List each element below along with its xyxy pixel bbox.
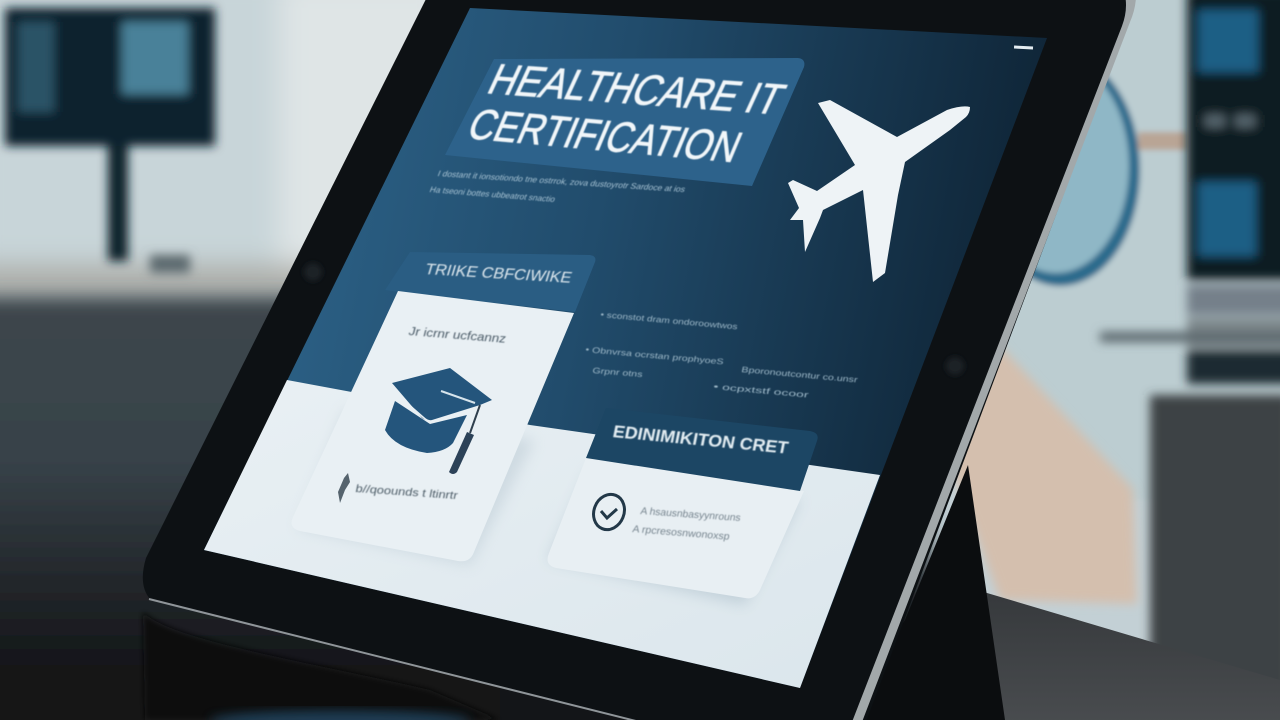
education card header [586,408,818,491]
card caption: Jr icrnr ucfcannz [407,324,508,346]
blurred equipment panel [1100,0,1280,695]
card footer: b//qoounds t ltinrtr [354,483,459,502]
tablet bezel [143,0,1132,720]
card footer icon [338,473,350,503]
bullet list: • Obnvrsa ocrstan prophyoeS [585,345,725,366]
title box [445,58,804,186]
bullet list: • ocpxtstf ocoor [713,382,810,400]
intro text: I dostant it ionsotiondo tne ostrrok, zova dustoyrotr Sardoce at ios [436,168,687,194]
screen dark blue background [204,8,1047,688]
icon: graduation cap [385,368,492,474]
airplane icon [788,100,970,282]
title: HEALTHCARE IT [481,56,792,124]
bullet list: Bporonoutcontur co.unsr [741,365,859,384]
icon: check circle [588,490,630,534]
tablet metal edge [852,0,1136,720]
window dash [1014,46,1033,50]
tablet [143,0,1136,720]
education card heading: EDINIMIKITON CRET [611,421,791,458]
training card [292,291,574,565]
tablet lower rim [149,599,640,720]
bullet list [585,310,859,400]
screen lower light area [204,380,880,688]
education card text: A hsausnbasyynrouns [639,506,742,524]
blurred wall monitor [5,8,215,273]
intro text: Ha tseoni bottes ubbeatrot snactio [428,184,557,204]
bullet list: • sconstot dram ondoroowtwos [600,310,738,331]
title [461,56,792,172]
camera dots [304,263,964,375]
education card [548,408,818,605]
section heading tab [385,252,595,312]
section heading: TRIIKE CBFCIWIKE [423,261,574,287]
education card text: A rpcresosnwonoxsp [631,524,731,543]
bullet list: Grpnr otns [592,366,643,379]
screen [204,8,1047,688]
dark table [0,296,1280,720]
intro text [428,168,687,204]
tablet stand [840,465,1005,720]
education card text [631,506,742,543]
title: CERTIFICATION [461,101,749,172]
blurred hand [950,335,1137,604]
